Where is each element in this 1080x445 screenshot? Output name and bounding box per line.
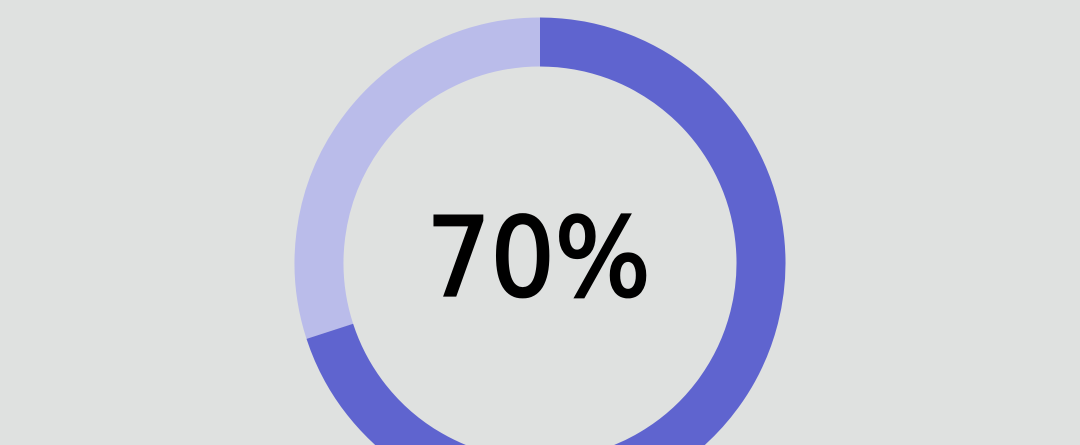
donut remainder segment: 30% xyxy=(319,42,540,331)
donut value segment: 70% xyxy=(330,42,761,445)
center percentage label: 70% xyxy=(426,195,651,321)
